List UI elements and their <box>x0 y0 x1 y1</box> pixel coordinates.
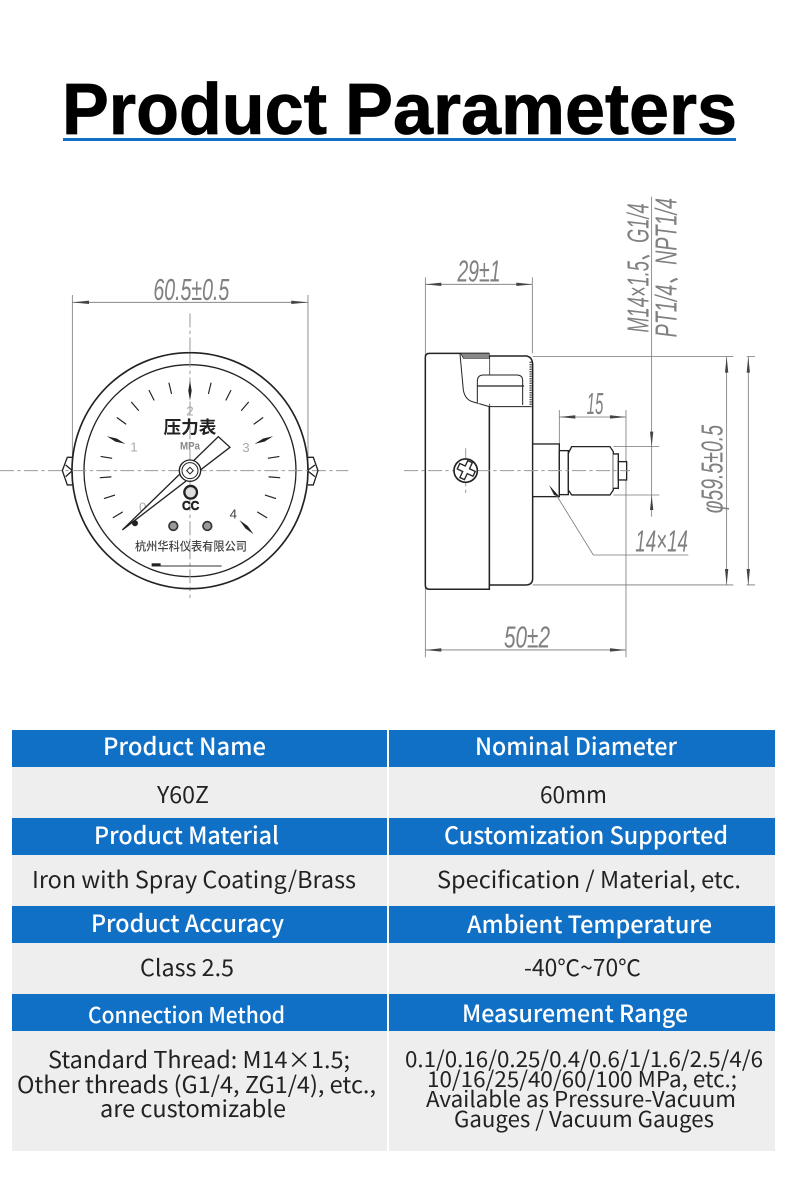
title: Product <box>62 70 327 150</box>
center lines <box>0 313 348 600</box>
dimension: total depth 50±2: 50±2 <box>504 620 550 654</box>
table row: material and customization headers <box>12 816 775 855</box>
table row: material and customization headers: Product Material <box>94 816 279 851</box>
dial numbers <box>130 403 250 521</box>
thread specification line 2: PT1/4、NPT1/4 <box>650 198 684 337</box>
dimension: connector length 15 <box>559 387 626 421</box>
parameter table <box>12 727 775 1151</box>
threaded connector <box>533 444 627 497</box>
dial numbers: 0 <box>139 499 146 514</box>
table row: accuracy and temperature values <box>12 943 775 994</box>
gauge case side <box>425 353 533 589</box>
center line and screw <box>404 448 630 493</box>
table row: accuracy and temperature values: Class 2.5 <box>140 949 234 983</box>
dimension: hex leader 14×14 <box>549 485 688 559</box>
measurement range text: Available as Pressure-Vacuum <box>426 1082 736 1114</box>
needle <box>122 437 230 530</box>
certification marks <box>169 486 212 530</box>
dimension: width 60.5±0.5 <box>72 273 308 460</box>
table row: material and customization values: Specification / Material, etc. <box>437 861 741 895</box>
gauge case and dial <box>72 353 308 589</box>
dimension: depth 29±1: 29±1 <box>457 254 501 288</box>
measurement range text: 0.1/0.16/0.25/0.4/0.6/1/1.6/2.5/4/6 <box>405 1042 763 1074</box>
serial number line <box>152 565 222 566</box>
dial ticks <box>100 381 280 535</box>
measurement range text: Gauges / Vacuum Gauges <box>454 1102 714 1134</box>
table row: connection and range headers: Connection Method <box>88 998 285 1030</box>
diagram: gauge side view <box>404 197 755 657</box>
dimension: total depth 50±2 <box>425 620 626 654</box>
connection method text: are customizable <box>100 1090 286 1124</box>
needle hub <box>179 460 201 481</box>
dimension: diameter 59.5±0.5 <box>696 357 750 585</box>
table row: material and customization values: Iron with Spray Coating/Brass <box>32 861 356 895</box>
dimension: diameter 59.5±0.5: φ59.5±0.5 <box>696 424 730 513</box>
mounting lugs <box>62 457 318 485</box>
connection method text: Standard Thread: M14×1.5; <box>48 1041 350 1075</box>
table row: name and diameter headers: Product Name <box>103 727 266 762</box>
dimension: depth 29±1 <box>425 254 532 288</box>
dial numbers: 1 <box>130 439 138 454</box>
measurement range text: 10/16/25/40/60/100 MPa, etc.; <box>427 1062 737 1094</box>
table row: name and diameter values: Y60Z <box>156 776 209 810</box>
table row: accuracy and temperature headers: Product Accuracy <box>91 904 284 939</box>
table row: material and customization headers: Customization Supported <box>444 816 728 851</box>
manufacturer name: 杭州华科仪表有限公司 <box>135 538 247 555</box>
table row: name and diameter values <box>12 767 775 818</box>
table row: connection and range headers: Measurement Range <box>462 994 688 1029</box>
connection method text: Other threads (G1/4, ZG1/4), etc., <box>17 1066 376 1100</box>
diagram: gauge front view <box>0 273 348 600</box>
table row: connection and range headers <box>12 994 775 1031</box>
table row: accuracy and temperature headers: Ambient Temperature <box>467 905 712 940</box>
connection method text <box>17 1041 376 1124</box>
dial label: pressure gauge: 压力表 <box>163 414 217 439</box>
dial numbers: 2 <box>186 403 194 418</box>
dimension: hex leader 14×14: 14×14 <box>635 525 688 559</box>
title <box>62 70 737 150</box>
table row: connection and range values <box>12 1031 775 1151</box>
table row: name and diameter headers <box>12 727 775 767</box>
dial numbers: 4 <box>230 506 238 521</box>
dimension: width 60.5±0.5: 60.5±0.5 <box>153 273 230 307</box>
dial unit: MPa <box>180 440 200 452</box>
table row: accuracy and temperature values: -40℃~70℃ <box>524 949 641 983</box>
side extension and dimension lines <box>425 197 755 657</box>
table row: name and diameter headers: Nominal Diameter <box>475 727 677 762</box>
dimension: connector length 15: 15 <box>587 387 604 421</box>
thread specification line 1: M14×1.5、G1/4 <box>622 203 656 333</box>
table row: accuracy and temperature headers <box>12 904 775 943</box>
certification marks: CC <box>182 498 200 513</box>
measurement range text <box>405 1042 763 1134</box>
title: Parameters <box>345 70 737 150</box>
table row: name and diameter values: 60mm <box>540 776 607 810</box>
dimension arrows: thread size <box>650 432 653 510</box>
table row: material and customization values <box>12 855 775 906</box>
dial numbers: 3 <box>242 440 250 455</box>
